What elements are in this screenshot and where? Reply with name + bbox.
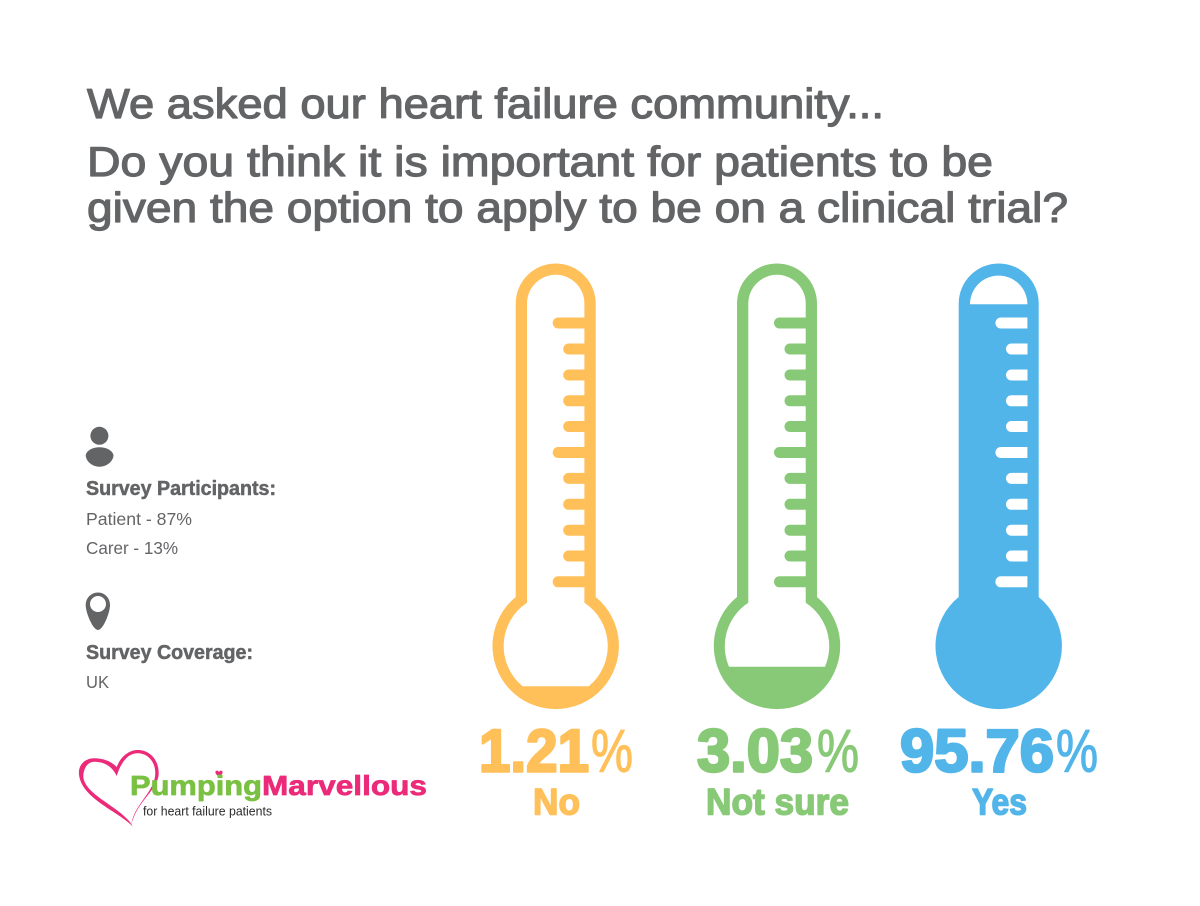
- stat: 3.03% Not sure: %: [817, 718, 859, 785]
- stat: 1.21% No: 1.21: [479, 718, 589, 785]
- survey participants text: Survey Participants:: [86, 478, 276, 500]
- stat: 3.03% Not sure: 3.03: [697, 718, 813, 785]
- survey coverage text: [86, 642, 253, 692]
- icon: person: [86, 427, 114, 467]
- stat: 1.21% No: [479, 718, 633, 822]
- stat: 95.76% Yes: 95.76: [900, 718, 1054, 785]
- title: [87, 80, 1068, 231]
- icon: location pin: [86, 592, 110, 630]
- logo: Pumping Marvellous: [79, 750, 427, 827]
- stat: 1.21% No: %: [591, 718, 633, 785]
- thermometer: Yes 95.76%: [936, 264, 1062, 709]
- stat: 95.76% Yes: %: [1056, 718, 1098, 785]
- survey coverage text: UK: [86, 672, 109, 692]
- stat: 95.76% Yes: [900, 718, 1098, 822]
- survey participants text: Carer - 13%: [86, 538, 178, 558]
- stat: 95.76% Yes: Yes: [972, 782, 1027, 822]
- thermometer: No 1.21%: [492, 264, 619, 709]
- logo wordmark: Pumping: [130, 770, 262, 801]
- stat: 3.03% Not sure: [697, 718, 859, 822]
- title: given the option to apply to be on a clinical trial?: [87, 184, 1068, 231]
- title: We asked our heart failure community...: [87, 80, 884, 127]
- thermometer: Not sure 3.03%: [714, 264, 840, 709]
- title: Do you think it is important for patients to be: [87, 138, 993, 185]
- logo: Pumping Marvellous: Marvellous: [262, 770, 427, 801]
- logo heart outline: [79, 750, 159, 827]
- logo small heart: [215, 771, 223, 777]
- logo tagline: for heart failure patients: [143, 804, 272, 818]
- survey coverage text: Survey Coverage:: [86, 642, 253, 664]
- survey participants text: Patient - 87%: [86, 509, 192, 529]
- stat: 3.03% Not sure: Not sure: [706, 782, 849, 822]
- stat: 1.21% No: No: [533, 782, 580, 822]
- survey participants text: [86, 478, 276, 558]
